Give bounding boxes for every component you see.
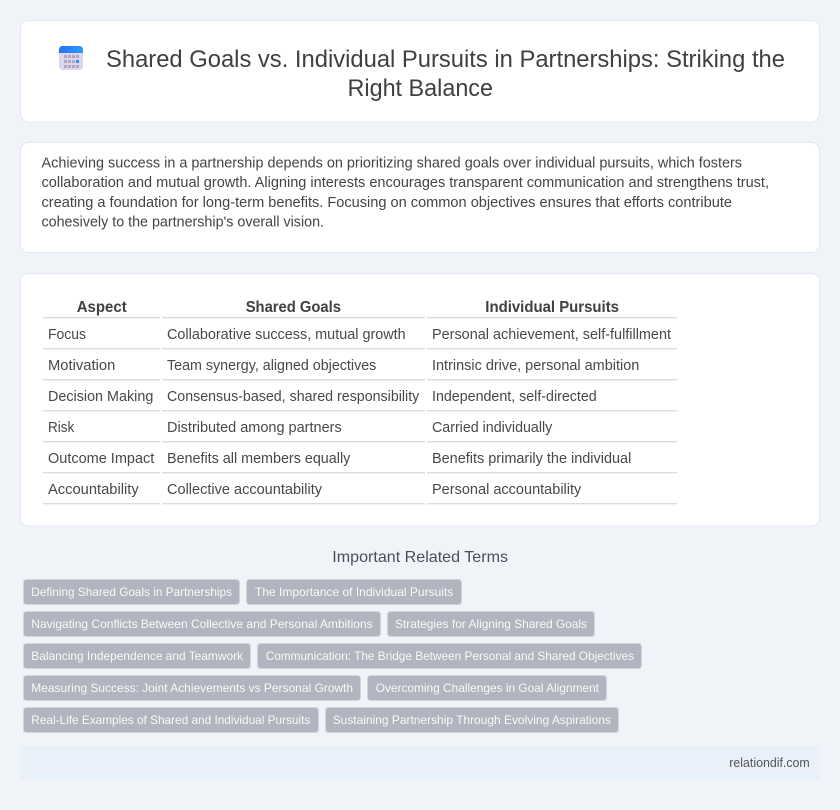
- table header row: Shared Goals: [246, 299, 341, 316]
- table row: Focus: [43, 327, 677, 349]
- chip: [24, 612, 380, 636]
- chip: Overcoming Challenges in Goal Alignment: [376, 681, 600, 695]
- icon: calendar: [59, 46, 83, 70]
- table header row: [43, 299, 677, 318]
- table row: Risk: [43, 420, 677, 442]
- chip: [388, 612, 594, 636]
- table row: Decision Making: Decision Making: [48, 389, 153, 405]
- table row: Focus: Collaborative success, mutual growth: [167, 327, 406, 343]
- table row: Accountability: Accountability: [48, 482, 140, 498]
- table row: Accountability: [43, 482, 677, 504]
- title: Right Balance: [348, 75, 493, 102]
- table row: Outcome Impact: Benefits primarily the individual: [432, 451, 631, 467]
- chip: [24, 708, 318, 732]
- chip: Balancing Independence and Teamwork: [31, 649, 244, 663]
- title: Shared Goals vs. Individual Pursuits in Partnerships: Striking the: [106, 46, 785, 73]
- table row: Accountability: Collective accountability: [167, 482, 323, 498]
- text block: intro: Achieving success in a partnership depends on prioritizing shared goals over individual pursuits, which fosters: [42, 156, 742, 172]
- chip: Measuring Success: Joint Achievements vs Personal Growth: [31, 681, 353, 695]
- footer bar: relationdif.com: [729, 755, 810, 770]
- table row: Accountability: Personal accountability: [432, 482, 582, 498]
- chip: Defining Shared Goals in Partnerships: [31, 585, 232, 599]
- table header row: Aspect: [77, 299, 127, 316]
- table row: Decision Making: Consensus-based, shared responsibility: [167, 389, 420, 405]
- chip: The Importance of Individual Pursuits: [255, 585, 453, 599]
- table header row: Individual Pursuits: [485, 299, 619, 316]
- panel: title card: [20, 20, 820, 122]
- chip: [246, 580, 462, 604]
- table row: Motivation: [43, 358, 677, 380]
- chip: [24, 644, 250, 668]
- table row: Decision Making: [43, 389, 677, 411]
- table row: Risk: Distributed among partners: [167, 420, 342, 436]
- chip: Navigating Conflicts Between Collective and Personal Ambitions: [31, 617, 373, 631]
- heading: related terms: Important Related Terms: [332, 549, 508, 566]
- table row: Decision Making: Independent, self-directed: [432, 389, 597, 405]
- table row: Outcome Impact: Benefits all members equally: [167, 451, 351, 467]
- chip: Sustaining Partnership Through Evolving Aspirations: [333, 713, 611, 727]
- table row: Focus: Personal achievement, self-fulfillment: [432, 327, 671, 343]
- table row: Motivation: Intrinsic drive, personal ambition: [432, 358, 639, 374]
- chip: [24, 580, 240, 604]
- table row: Motivation: Team synergy, aligned objectives: [167, 358, 376, 374]
- panel: intro paragraph: [20, 142, 820, 252]
- chip: [258, 644, 642, 668]
- chip: Real-Life Examples of Shared and Individual Pursuits: [31, 713, 310, 727]
- chip: [326, 708, 618, 732]
- table row: Outcome Impact: [43, 451, 677, 473]
- text block: intro: collaboration and mutual growth. Aligning interests encourages transparent communication and strengthens trust,: [42, 175, 769, 191]
- text block: intro: creating a foundation for long-term benefits. Focusing on common objectives ensures that efforts contribute: [42, 195, 732, 211]
- text block: intro: [42, 156, 769, 230]
- footer bar: [20, 746, 820, 780]
- table row: Motivation: Motivation: [48, 358, 115, 374]
- table row: Focus: Focus: [48, 327, 86, 343]
- chip: Strategies for Aligning Shared Goals: [395, 617, 587, 631]
- title: [106, 46, 785, 102]
- chip: [24, 676, 360, 700]
- chip: Communication: The Bridge Between Personal and Shared Objectives: [266, 649, 634, 663]
- chip: [368, 676, 606, 700]
- table row: Outcome Impact: Outcome Impact: [48, 451, 154, 467]
- text block: intro: cohesively to the partnership's overall vision.: [42, 214, 324, 230]
- table row: Risk: Carried individually: [432, 420, 553, 436]
- table row: Risk: Risk: [48, 420, 75, 436]
- panel: related term chips: [24, 580, 642, 732]
- panel: comparison table: [20, 274, 820, 526]
